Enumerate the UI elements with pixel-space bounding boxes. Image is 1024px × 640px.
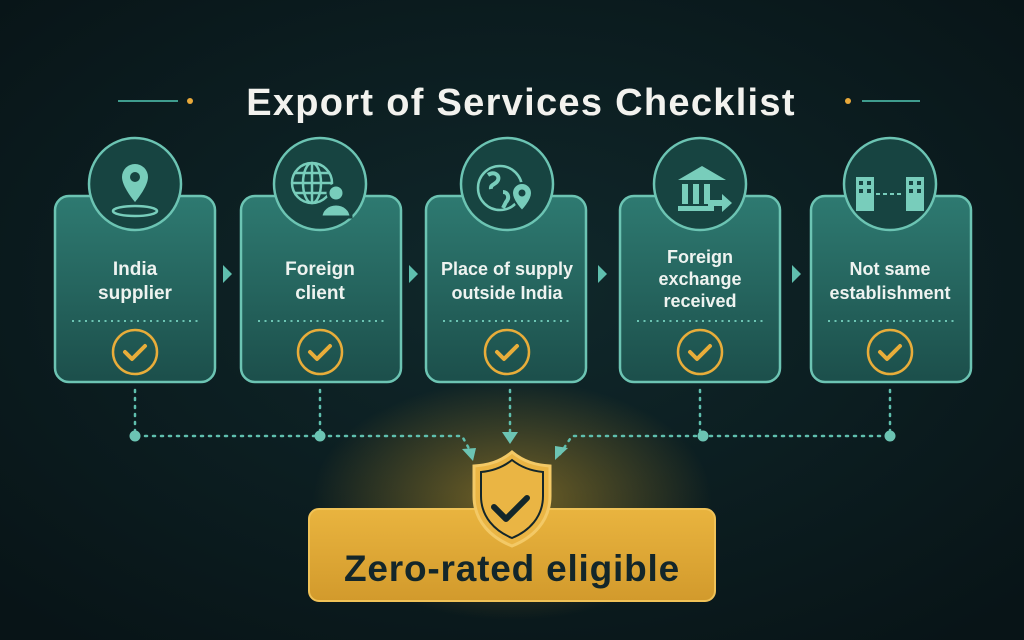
result box: Zero-rated eligible bbox=[344, 548, 680, 589]
card: Foreign client: Foreign bbox=[285, 259, 355, 280]
card: Not same establishment: establishment bbox=[829, 283, 951, 303]
card: India supplier: India bbox=[113, 259, 158, 280]
arrow bbox=[792, 265, 801, 283]
card: Foreign exchange received: Foreign bbox=[667, 247, 733, 267]
card: India supplier: supplier bbox=[98, 283, 173, 304]
icon: globe with pin bbox=[478, 166, 532, 211]
card: Place of supply: outside India bbox=[451, 283, 563, 303]
card: Foreign client bbox=[241, 138, 401, 382]
title bbox=[118, 82, 920, 124]
arrow bbox=[223, 265, 232, 283]
card: Foreign exchange received bbox=[620, 138, 780, 382]
card: Place of supply: Place of supply bbox=[441, 259, 573, 279]
card: Foreign exchange received: exchange bbox=[658, 269, 742, 289]
result box bbox=[309, 509, 715, 601]
icon: location pin bbox=[113, 164, 157, 216]
title: Export of Services Checklist bbox=[246, 82, 796, 124]
connectors bbox=[135, 390, 890, 454]
card: India supplier bbox=[55, 138, 215, 382]
arrow bbox=[409, 265, 418, 283]
icon: globe person bbox=[292, 163, 332, 203]
icon: two buildings bbox=[856, 177, 924, 211]
card: Foreign client: client bbox=[295, 283, 345, 304]
card: Not same establishment bbox=[811, 138, 971, 382]
icon: bank arrow bbox=[678, 166, 732, 212]
card: Not same establishment: Not same bbox=[849, 259, 931, 279]
card: Foreign exchange received: received bbox=[663, 291, 737, 311]
arrow bbox=[598, 265, 607, 283]
icon: shield bbox=[474, 452, 550, 546]
card: Place of supply bbox=[426, 138, 586, 382]
